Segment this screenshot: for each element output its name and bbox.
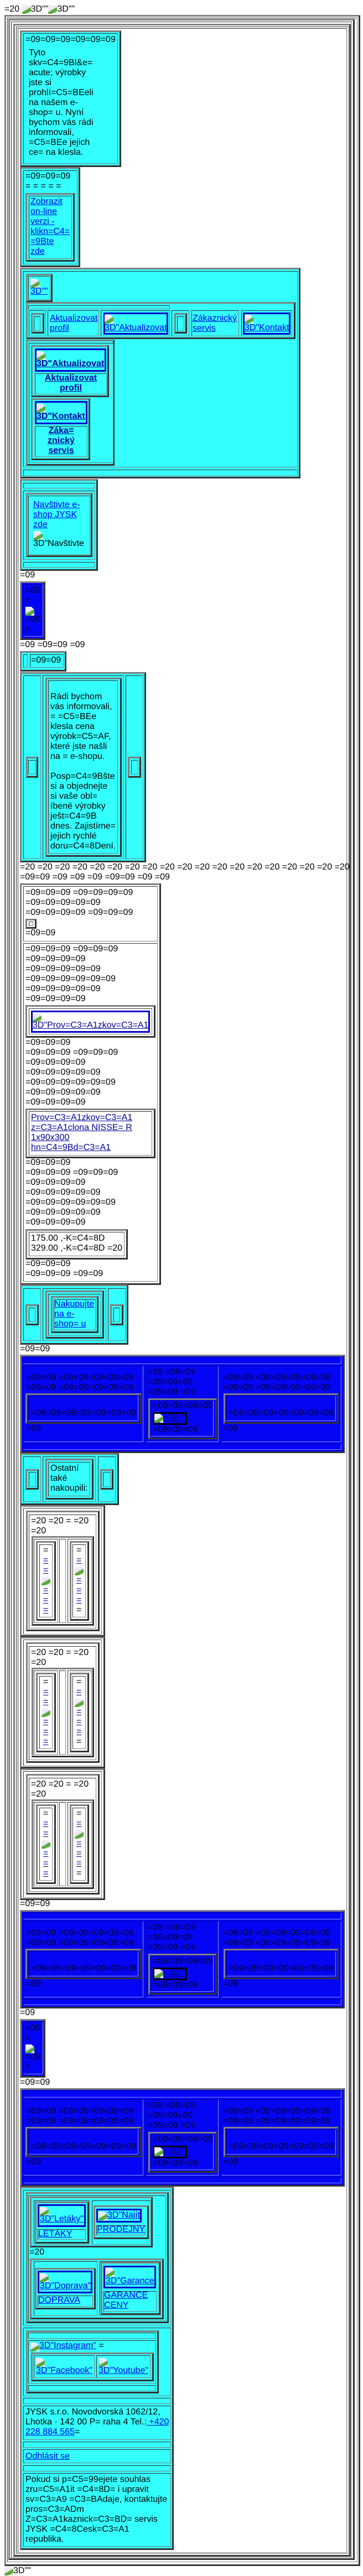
page top text line: =20 3D"" 3D""	[4, 4, 75, 14]
link: online version: zde	[30, 247, 45, 256]
panel: product detail: =09=09=09=09=09=09	[25, 974, 116, 983]
panel: product recommendation 1	[20, 1505, 105, 1637]
panel: blue three-column block 3: =09=09 =09=09=09=09=09	[26, 2116, 133, 2126]
panel: product recommendation 2: =20 =20 = =20	[31, 1648, 89, 1657]
message text: vás informovali,	[50, 702, 112, 711]
code lines	[25, 888, 133, 917]
heading text: také	[50, 1474, 67, 1483]
link: shop on e-shop: shop= u	[54, 1319, 86, 1329]
intro paragraph: Tyto	[29, 48, 45, 58]
link: visit e-shop: shop JYSK	[33, 510, 77, 519]
unsubscribe note: JYSK =C4=8Cesk=C3=A1	[25, 2525, 129, 2534]
intro paragraph: bychom vás rádi	[29, 118, 93, 127]
panel: product recommendation 3: =	[43, 1819, 48, 1828]
button: contact image	[243, 313, 291, 335]
panel: blue three-column block 2: =09=09 =09=09=09=09=09	[223, 1928, 330, 1938]
message text: které jste našli	[50, 742, 107, 751]
link: customer service: servis	[193, 324, 216, 333]
code lines: =09=09=09=09 =09=09=09	[25, 908, 133, 917]
panel: blue three-column block 1: =09=09=09	[153, 1425, 198, 1434]
panel: blue three-column block 1: =09=09 =09=09=09=09=09	[223, 1383, 330, 1392]
code line: =09	[20, 2008, 35, 2017]
panel: blue three-column block 1: =09=09 =09	[148, 1387, 195, 1397]
product name link	[25, 1109, 155, 1158]
link: online version: on-line	[30, 207, 57, 216]
panel: footer	[20, 2187, 174, 2550]
panel: product detail: =09=09=09 =09=09	[25, 1269, 103, 1278]
panel: blue three-column block 1: =09=09=09	[148, 1377, 193, 1387]
panel: product recommendation 3: =	[43, 1829, 48, 1838]
button: update profile image	[103, 313, 168, 335]
panel: product detail: =09=09=09=09	[25, 1217, 86, 1227]
footer links row 2: delivery and price guarantee: 3D"Doprava"	[40, 2281, 91, 2291]
panel: product recommendation 1: =	[43, 1565, 48, 1575]
panel: product recommendation 1: =	[43, 1545, 48, 1555]
panel: product recommendation 3: =	[76, 1819, 81, 1828]
intro code line: =09=09=09=09=09=09	[25, 35, 116, 44]
intro paragraph: skv=C4=9Bl&e=	[29, 58, 92, 67]
panel: navigation header	[20, 268, 300, 478]
code line: =09 =09=09 =09	[20, 640, 85, 649]
message text: výrobk=C5=AF,	[50, 732, 111, 741]
panel: small blue block 1: =09	[25, 586, 40, 595]
bold link: update profile: profil	[60, 383, 82, 393]
panel: product recommendation 3: =	[76, 1869, 81, 1878]
panel: blue three-column block 2: =09=09=09=09=09=09=09	[31, 1964, 136, 1973]
panel: product recommendation 1: =	[76, 1595, 81, 1605]
panel: blue three-column block 3: =09=09=09=09	[153, 2135, 213, 2144]
panel: product recommendation 2: =20	[31, 1658, 46, 1667]
panel: product recommendation 2: =	[43, 1717, 48, 1726]
panel: product recommendation 1: =	[43, 1595, 48, 1605]
panel: product recommendation 2	[20, 1637, 105, 1768]
navigation row: 3D"Kontakt	[245, 323, 289, 332]
panel: product detail: =09=09=09 =09=09=09	[25, 1048, 118, 1057]
panel: product detail: =09=09=09=09=09	[25, 964, 101, 974]
code line: =09	[20, 570, 35, 580]
panel: small code row	[20, 651, 66, 672]
panel: blue three-column block 2: =09=09=09=09	[153, 1956, 213, 1966]
panel: online version link	[20, 167, 80, 267]
panel: product detail: =09=09=09 =09=09=09	[25, 1168, 118, 1177]
bold link: customer service: znický	[48, 436, 75, 445]
panel: small blue block 2: =09	[25, 2023, 40, 2033]
panel: blue three-column block 2: =09=09 =09=09=09=09=09	[26, 1928, 133, 1938]
link: delivery: DOPRAVA	[38, 2296, 80, 2305]
panel: product detail: =09=09=09	[25, 1259, 70, 1268]
code line: =09=09	[20, 2078, 50, 2087]
panel: price drop message	[20, 672, 146, 862]
social links: 3D"Instagram" =	[39, 2341, 104, 2350]
message text: íbené výrobky	[50, 802, 106, 811]
panel: product recommendation 2: =	[76, 1687, 81, 1696]
panel: product recommendation 2: =	[76, 1707, 81, 1716]
unsubscribe note: Pokud si p=C5=99ejete souhlas	[25, 2475, 151, 2484]
navigation row	[26, 302, 295, 339]
intro paragraph: jste si	[29, 78, 51, 87]
panel: blue three-column block 3: =09	[223, 2157, 238, 2167]
footer links row 2: delivery and price guarantee: 3D"Garance	[106, 2276, 154, 2286]
message text: Posp=C4=9Bšte	[50, 772, 115, 781]
panel: product recommendation 2: =	[43, 1737, 48, 1746]
panel: product recommendation 3	[20, 1768, 105, 1900]
panel: product detail: =09=09=09=09=09	[25, 1087, 101, 1097]
product image link	[25, 1005, 155, 1038]
message text: = =C5=BEe	[50, 712, 96, 721]
panel: product recommendation 1: =	[76, 1585, 81, 1595]
panel: product recommendation 1: =	[76, 1555, 81, 1565]
code lines	[20, 862, 350, 882]
unsubscribe note: republika.	[25, 2535, 64, 2544]
code line: =09=09	[20, 1899, 50, 1908]
panel: blue three-column block 2: =09=09=09	[148, 1933, 193, 1942]
code lines: =20 =20 =20 =20 =20 =20 =20 =20 =20 =20 =20 =20 =20 =20 =20 =20 =20 =20 =20	[20, 862, 350, 872]
panel: product recommendation 3: =	[43, 1849, 48, 1858]
panel: product recommendation 1: =	[43, 1605, 48, 1615]
panel: small blue block 1	[20, 581, 45, 640]
company address	[25, 2407, 169, 2437]
panel: blue three-column block 2: =09=09 =09=09=09=09=09	[223, 1938, 330, 1948]
panel: product detail: =09=09=09=09	[25, 1058, 86, 1067]
unsubscribe note: zru=C5=A1it =C4=8D= i upravit	[25, 2485, 149, 2494]
panel: small blue block 1: =	[25, 625, 30, 634]
code text: =20	[29, 2247, 44, 2257]
link: update profile: profil	[50, 324, 69, 333]
message text: jejich rychlé	[50, 831, 97, 841]
panel: blue three-column block 1: =09=09 =09=09=09=09=09	[223, 1373, 330, 1382]
panel: product recommendation 1: =	[43, 1555, 48, 1565]
panel: blue three-column block 3: =09=09=09	[153, 2158, 198, 2168]
product name link: z=C3=A1clona NISSE= R	[31, 1123, 132, 1132]
link: online version: verzi -	[30, 217, 55, 226]
company address: JYSK s.r.o. Novodvorská 1062/12,	[25, 2407, 160, 2417]
social links: 3D"Youtube"	[98, 2366, 148, 2375]
icon: broken image bottom	[4, 2567, 13, 2575]
panel: product recommendation 1: =	[76, 1605, 81, 1615]
panel: product detail: =09=09=09=09	[25, 1178, 86, 1187]
link: visit e-shop	[33, 500, 80, 529]
message text: ješt=C4=9B	[50, 811, 97, 821]
intro paragraph: ce= na klesla.	[29, 148, 83, 157]
panel: product recommendation 2: =	[76, 1727, 81, 1736]
link: shop on e-shop: Nakupujte	[54, 1299, 94, 1309]
panel: blue three-column block 2: =09=09 =09=09=09=09=09	[26, 1938, 133, 1948]
link: price guarantee: GARANCE	[104, 2291, 148, 2300]
link: online version: klikn=C4=	[30, 227, 70, 236]
image alt text: 3D"Navštivte	[33, 539, 84, 548]
panel: product detail: =09=09=09=09=09	[25, 1068, 101, 1077]
heading text: Ostatní	[50, 1464, 79, 1473]
link: shop on e-shop	[54, 1299, 94, 1329]
panel: product detail: =09=09=09=09	[25, 954, 86, 964]
unsubscribe note: Z=C3=A1kaznick=C3=BD= servis	[25, 2515, 158, 2524]
price box	[25, 1229, 128, 1260]
panel: product detail: =09=09=09=09=09=09	[25, 1078, 116, 1087]
panel: blue three-column block 3: =09	[26, 2157, 41, 2167]
code lines: = = = = =	[25, 181, 61, 191]
panel: product detail: =09=09=09=09	[25, 1097, 86, 1107]
panel: shop on e-shop	[20, 1284, 128, 1345]
panel: product recommendation 2: =	[43, 1677, 48, 1687]
panel: blue three-column block 1: =09=09=09=09=09=09=09	[229, 1408, 334, 1418]
panel: small code row: =09=09	[31, 655, 61, 665]
footer links row 1: leaflets and stores: 3D"Najít	[107, 2210, 140, 2220]
unsubscribe note: sv=C3=A9 =C3=BAdaje, kontaktujte	[25, 2495, 167, 2504]
link: leaflets: LETÁKY	[38, 2229, 72, 2239]
code lines: =09=09 =09 =09 =09 =09=09 =09 =09	[20, 872, 170, 882]
social links: 3D"Facebook"	[36, 2366, 92, 2375]
panel: product detail: =09=09=09=09=09	[25, 1188, 101, 1197]
panel: product recommendation 1: =	[43, 1585, 48, 1595]
panel: blue three-column block 2: =09=09=09	[153, 1980, 198, 1990]
panel: small blue block 1: =09	[25, 615, 40, 624]
code lines: =09=09=09	[25, 171, 70, 181]
panel: blue three-column block 3: =09=09 =09=09=09=09=09	[223, 2116, 330, 2126]
link: online version	[30, 197, 70, 256]
panel: blue three-column block 1: =09=09=09=09=09=09=09	[31, 1408, 136, 1418]
panel: blue three-column block 3: =09=09=09=09=09=09=09	[31, 2142, 136, 2151]
product image link: 3D"Prov=C3=A1zkov=C3=A1	[33, 1021, 148, 1030]
panel: product detail: =09=09	[25, 928, 55, 938]
panel: product recommendation 1: =	[76, 1545, 81, 1555]
panel: product recommendation 3: =	[43, 1859, 48, 1868]
panel: product recommendation 3: =	[43, 1869, 48, 1878]
heading text	[50, 1464, 88, 1493]
link: customer service: Zákaznický	[193, 314, 237, 323]
panel: product detail: =09=09=09 =09=09=09	[25, 944, 118, 954]
message text: klesla cena	[50, 722, 95, 731]
panel: blue three-column block 1: =09	[223, 1424, 238, 1433]
link: price guarantee	[104, 2291, 148, 2310]
panel: product recommendation 3: =	[76, 1849, 81, 1858]
bold link: customer service	[48, 426, 75, 455]
social links	[23, 2328, 171, 2396]
panel: blue three-column block 3: =09=09=09	[148, 2111, 193, 2120]
intro paragraph: acute; výrobky	[29, 68, 86, 77]
link: online version: Zobrazit	[30, 197, 63, 206]
panel: product detail: =09=09=09=09=09	[25, 984, 101, 993]
panel: blue three-column block 2	[20, 1910, 345, 2008]
product name link: hn=C4=9Bd=C3=A1	[31, 1143, 111, 1152]
bold link: customer service: servis	[48, 446, 74, 455]
panel: others also bought heading	[20, 1453, 119, 1505]
unsubscribe note: pros=C3=ADm	[25, 2505, 84, 2514]
icon: broken image	[34, 531, 43, 540]
icon: broken image top 2	[48, 5, 57, 14]
panel: product detail: =09=09=09	[25, 1038, 70, 1047]
link: shop on e-shop: na e-	[54, 1309, 74, 1319]
panel: product recommendation 2: =	[43, 1727, 48, 1736]
link: online version: =9Bte	[30, 237, 54, 246]
code lines	[25, 171, 70, 191]
panel: product recommendation 2: =	[43, 1687, 48, 1696]
panel: product detail: =09=09=09=09=09=09	[25, 1198, 116, 1207]
price box: 175.00 ,-K=C4=8D	[31, 1234, 105, 1243]
panel: blue three-column block 3: =09=09 =09	[148, 2121, 195, 2130]
panel: product recommendation 3: =	[76, 1839, 81, 1848]
message text: na = e-shopu.	[50, 752, 105, 761]
panel: product recommendation 2: =	[76, 1677, 81, 1687]
intro paragraph: na našem e-	[29, 98, 78, 107]
stacked bold navigation: 3D"Aktualizovat	[37, 359, 104, 368]
bold link: update profile	[44, 373, 97, 393]
price box: 329.00 ,-K=C4=8D =20	[31, 1243, 122, 1253]
code lines: =09=09=09=09=09	[25, 898, 101, 907]
message text	[50, 692, 116, 851]
link: visit e-shop: zde	[33, 520, 48, 529]
panel: product recommendation 3: =20 =20 = =20	[31, 1779, 89, 1789]
icon: broken image top 1	[22, 5, 31, 14]
panel: blue three-column block 2: =3D""	[163, 1969, 186, 1978]
panel: blue three-column block 3: =09=09 =09=09=09=09=09	[26, 2106, 133, 2116]
unsubscribe note	[25, 2475, 167, 2544]
panel: blue three-column block 3: =09=09 =09=09=09=09=09	[223, 2106, 330, 2116]
footer links row 1: leaflets and stores	[30, 2197, 153, 2247]
link: update profile: Aktualizovat	[50, 314, 97, 323]
logo box: 3D""	[30, 287, 48, 296]
panel: small blue block 2	[20, 2019, 45, 2078]
panel: product recommendation 2: =	[76, 1737, 81, 1746]
panel: small blue block 2: =09	[25, 2052, 40, 2062]
panel: product recommendation 2: =	[76, 1717, 81, 1726]
panel: blue three-column block 1: =09=09 =09=09=09=09=09	[26, 1383, 133, 1392]
panel: product recommendation 2: =	[43, 1697, 48, 1706]
panel: blue three-column block 1: =09=09 =09=09=09=09=09	[26, 1373, 133, 1382]
product name link: 1x90x300	[31, 1133, 69, 1142]
panel: product detail: =09=09=09=09=09	[25, 1208, 101, 1217]
panel: blue three-column block 3: =3D""	[163, 2147, 186, 2156]
link: stores: PRODEJNY	[97, 2225, 145, 2234]
logo box	[26, 274, 53, 302]
intro paragraph: informovali,	[29, 128, 74, 137]
intro paragraph: =C5=BEe jejich	[29, 138, 90, 147]
message text: si a objednejte	[50, 782, 107, 791]
panel: product recommendation 1: =20 =20 = =20	[31, 1516, 89, 1526]
intro paragraph	[29, 48, 94, 157]
panel: visit e-shop	[20, 479, 98, 571]
link: customer service	[193, 314, 237, 333]
panel: blue three-column block 1: =3D""	[163, 1413, 186, 1423]
stacked bold navigation: 3D"Kontakt	[37, 412, 85, 421]
company address: Lhotka · 142 00 P= raha 4 Tel.: +420	[25, 2417, 169, 2427]
panel: product recommendation 3: =	[43, 1809, 48, 1818]
panel: product recommendation 3: =	[76, 1809, 81, 1818]
panel: blue three-column block 1: =09 =09=09	[148, 1367, 195, 1377]
panel: blue three-column block 1	[20, 1355, 345, 1453]
bold link: update profile: Aktualizovat	[45, 373, 97, 383]
code lines: =09=09=09 =09=09=09=09	[25, 888, 133, 897]
link: log out: Odhlásit se	[25, 2452, 70, 2461]
panel: blue three-column block 1: =09=09=09=09	[153, 1401, 213, 1411]
stacked bold navigation	[26, 340, 115, 466]
message text: doru=C4=8Dení.	[50, 841, 116, 851]
panel: product recommendation 3: =	[76, 1859, 81, 1868]
panel: small blue block 2: =	[25, 2033, 30, 2043]
message text: si vaše obl=	[50, 792, 97, 801]
panel: blue three-column block 2: =09 =09=09	[148, 1923, 195, 1932]
panel: intro text	[20, 30, 121, 167]
code line: =09=09	[20, 1344, 50, 1354]
panel: small blue block 1: =	[25, 596, 30, 605]
message text: Rádi bychom	[50, 692, 102, 701]
panel: blue three-column block 2: =09=09 =09	[148, 1943, 195, 1952]
panel: blue three-column block 3: =09=09=09=09=09=09=09	[229, 2142, 334, 2151]
bold link: customer service: Záka=	[49, 426, 74, 435]
panel: blue three-column block 2: =09	[223, 1979, 238, 1989]
panel: product recommendation 1: =20	[31, 1526, 46, 1536]
panel: product recommendation 3: =20	[31, 1789, 46, 1799]
panel: small blue block 2: =	[25, 2062, 30, 2072]
panel: blue three-column block 3: =09 =09=09	[148, 2101, 195, 2110]
panel: product detail: =09=09=09=09	[25, 994, 86, 1003]
bottom alt text: 3D""	[13, 2566, 31, 2575]
heading text: nakoupili:	[50, 1484, 88, 1493]
panel: blue three-column block 3	[20, 2088, 345, 2187]
panel: product detail	[20, 883, 161, 1285]
product name link: Prov=C3=A1zkov=C3=A1	[31, 1113, 132, 1122]
intro paragraph: prohlí=C5=BEeli	[29, 88, 94, 97]
link: update profile	[50, 314, 97, 333]
footer links row 1: leaflets and stores: 3D"Letáky"	[40, 2214, 84, 2224]
footer links row 2: delivery and price guarantee	[30, 2258, 164, 2319]
panel: blue three-column block 1: =09	[26, 1424, 41, 1433]
link: visit e-shop: Navštivte e-	[33, 500, 80, 509]
company address: 228 884 565=	[25, 2427, 80, 2437]
panel: product recommendation 1: =	[76, 1575, 81, 1585]
panel: blue three-column block 2: =09	[26, 1979, 41, 1989]
navigation row: 3D"Aktualizovat	[105, 323, 167, 332]
intro paragraph: shop= u. Nyní	[29, 108, 84, 117]
message text: dnes. Zajistíme=	[50, 821, 116, 831]
panel: product detail: =09=09=09	[25, 1158, 70, 1167]
link: price guarantee: CENY	[104, 2301, 128, 2310]
panel: blue three-column block 2: =09=09=09=09=09=09=09	[229, 1964, 334, 1973]
